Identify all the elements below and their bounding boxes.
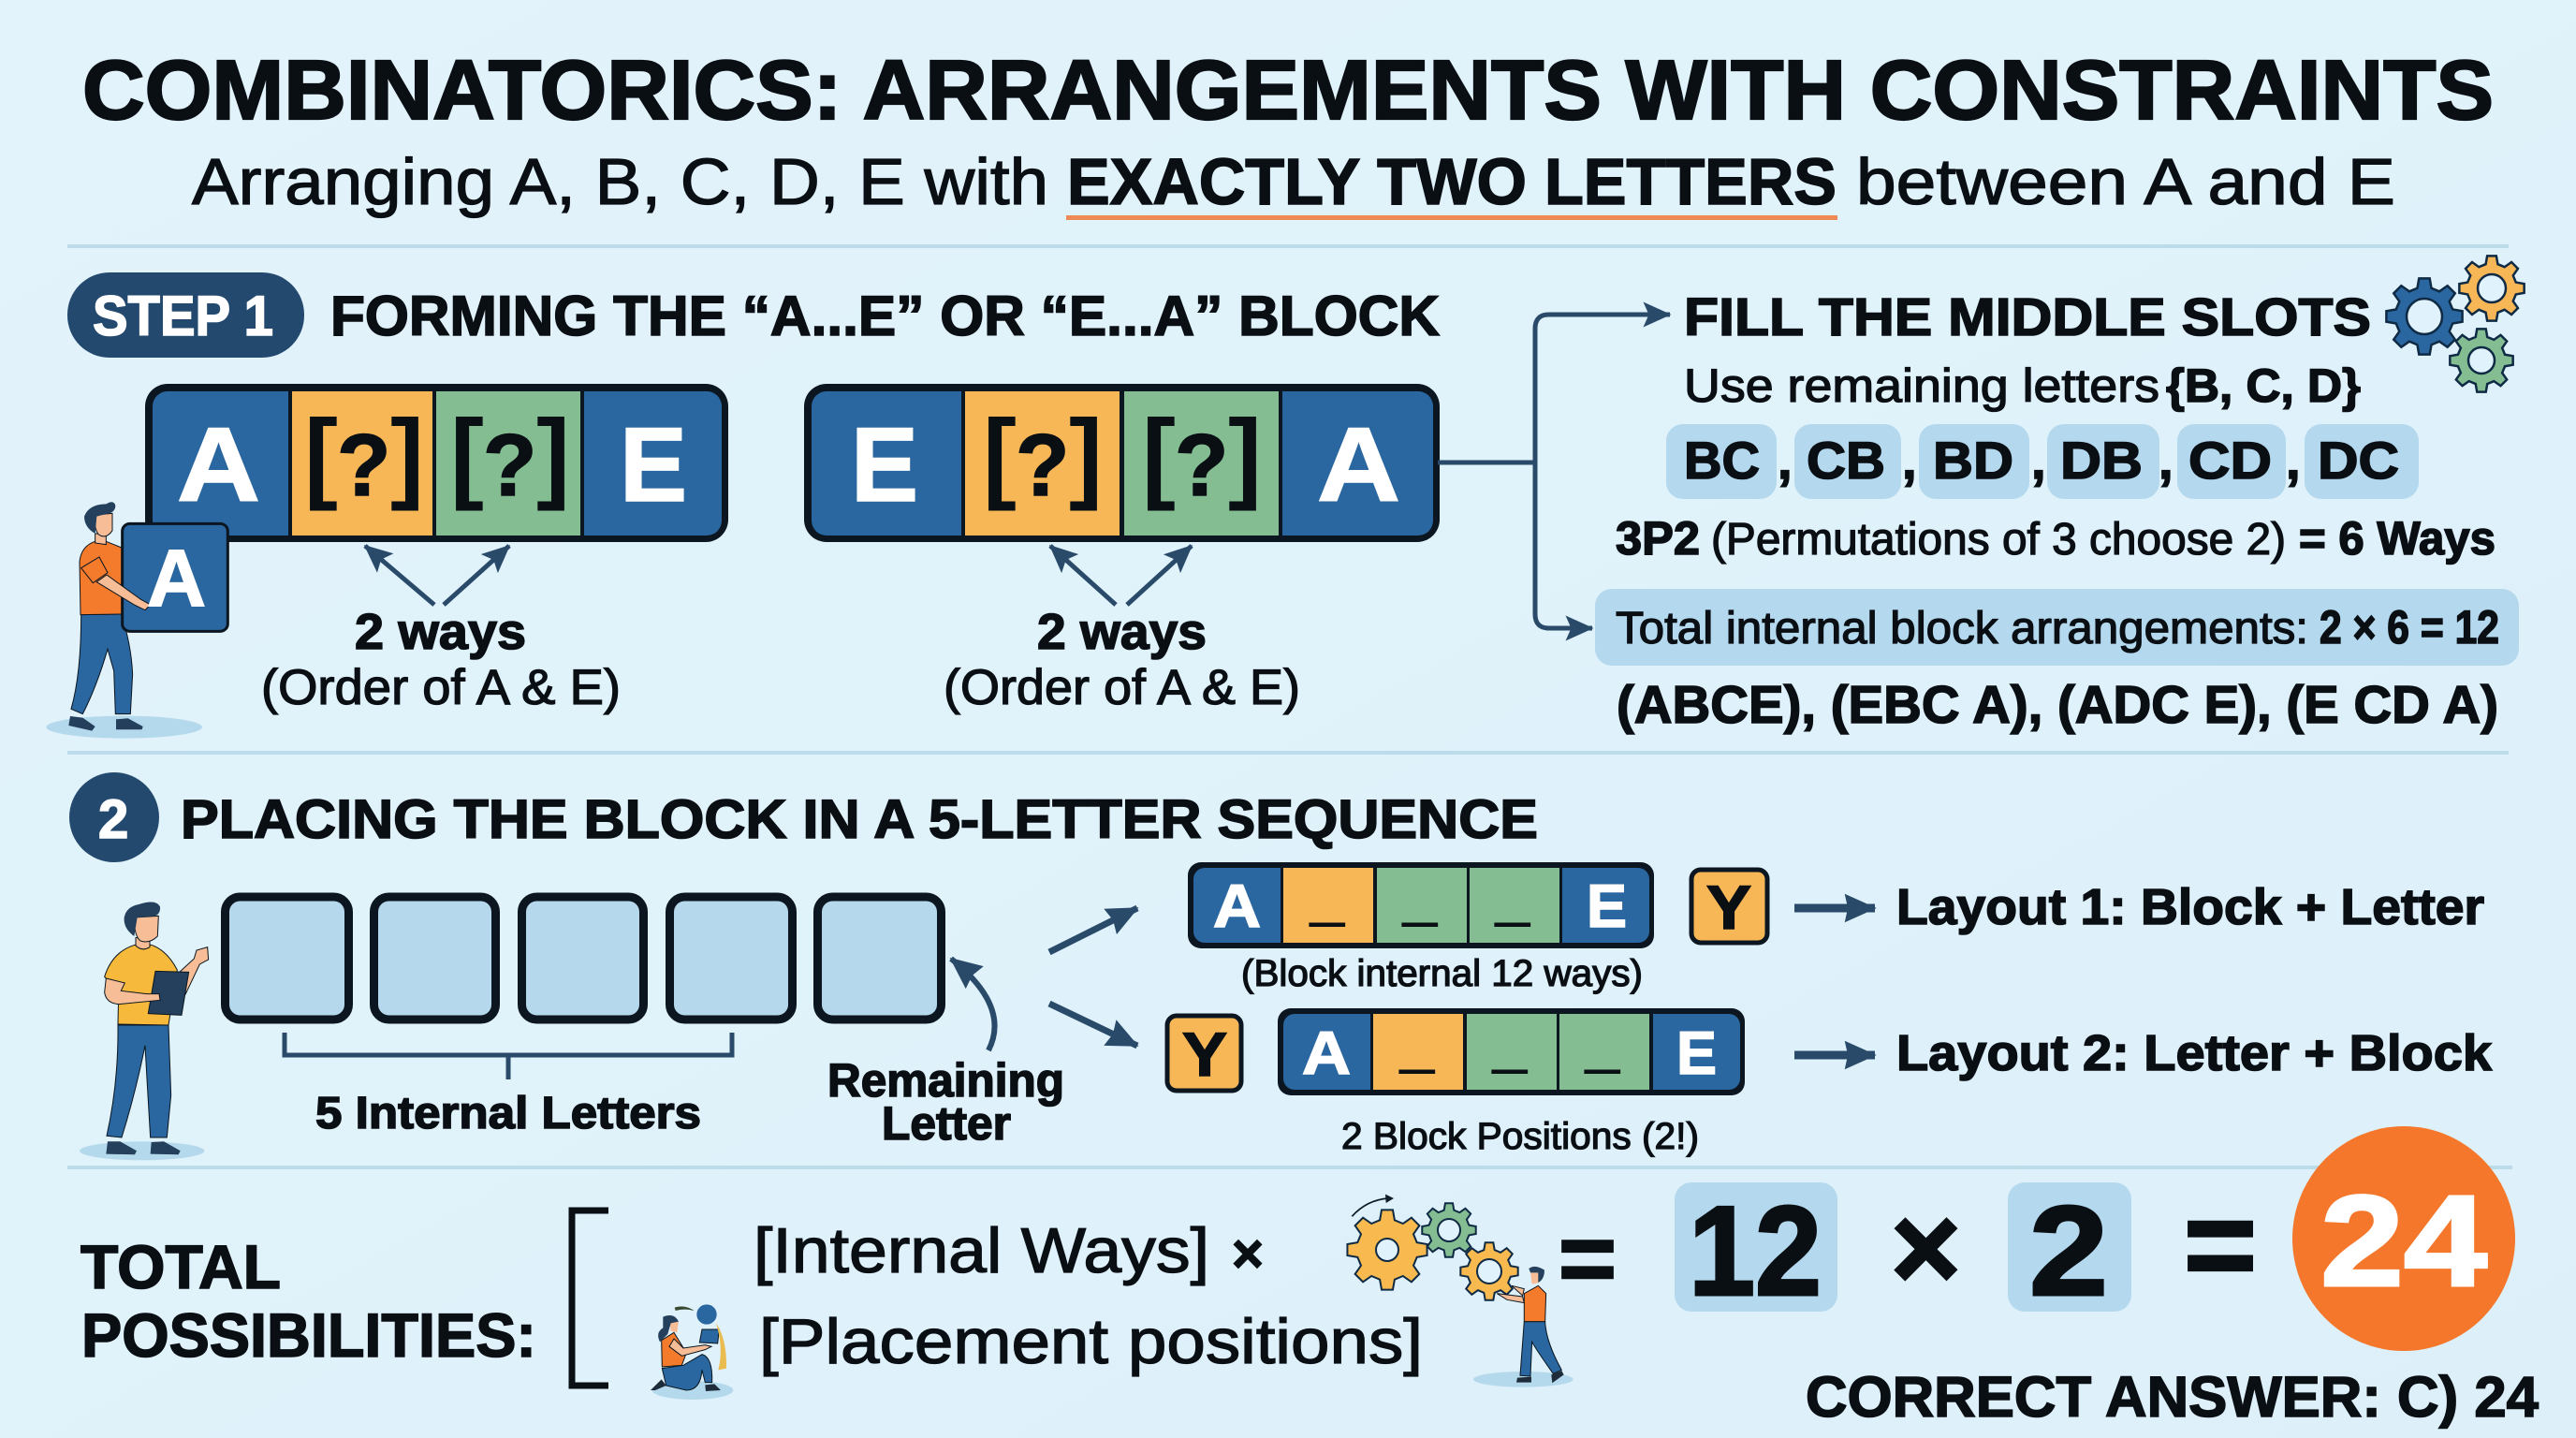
block: E ? ? A: ? bbox=[1175, 416, 1228, 514]
illustration: kneeling person bbox=[651, 1304, 733, 1400]
layout 2 block: _ bbox=[1399, 1011, 1435, 1078]
layout 1 block: _ bbox=[1495, 864, 1530, 932]
layout 1 block: _ bbox=[1310, 864, 1345, 932]
multiply sign: × bbox=[1891, 1181, 1961, 1315]
formula text bbox=[754, 1215, 1423, 1377]
label: 2 ways first block: (Order of A & E) bbox=[261, 660, 621, 715]
text: example arrangements: (ABCE), (EBC A), (ADC E), (E CD A) bbox=[1617, 675, 2498, 735]
step 2 badge bbox=[69, 772, 159, 862]
illustration: gears and person bbox=[1347, 1195, 1573, 1387]
label: 2 ways second block: 2 ways bbox=[1037, 604, 1207, 660]
label: total possibilities: POSSIBILITIES: bbox=[81, 1300, 536, 1370]
illustration: person holding A card bbox=[46, 502, 227, 739]
letter Y after block bbox=[1691, 870, 1767, 943]
callout: total internal arrangements: 2 × 6 = 12 bbox=[2320, 601, 2499, 653]
bracket: five internal letters bbox=[285, 1033, 732, 1079]
heading: fill the middle slots: FILL THE MIDDLE SLOTS bbox=[1684, 287, 2371, 347]
title: COMBINATORICS: ARRANGEMENTS WITH CONSTRAINTS bbox=[82, 44, 2494, 138]
block: E ? ? A: ? bbox=[1016, 416, 1069, 514]
illustration: person with clipboard bbox=[80, 902, 209, 1160]
big opening bracket bbox=[572, 1211, 608, 1386]
text: 3P2 formula: (Permutations of 3 choose 2) bbox=[1711, 515, 2286, 565]
step 1 heading: FORMING THE “A...E” OR “E...A” BLOCK bbox=[330, 285, 1440, 347]
layout 2 block bbox=[1278, 1008, 1745, 1095]
arrow: to layout 1 bbox=[1049, 908, 1137, 952]
chips: letter pairs: , bbox=[2031, 431, 2046, 490]
text: 3P2 formula: = 6 Ways bbox=[2299, 512, 2496, 565]
chips: letter pairs: BD bbox=[1933, 431, 2013, 490]
arrow: layout 2 bbox=[1794, 1050, 1875, 1060]
block: A ? ? E: ? bbox=[483, 416, 536, 514]
label: 2 ways first block: 2 ways bbox=[355, 604, 526, 660]
block: A ? ? E: [ ] bbox=[450, 398, 570, 511]
block: A ? ? E: E bbox=[620, 406, 687, 523]
chips: letter pairs: DB bbox=[2060, 431, 2143, 490]
block: A ? ? E: [ ] bbox=[304, 398, 424, 511]
label: layout 1: Layout 1: Block + Letter bbox=[1896, 879, 2484, 935]
equals sign: = bbox=[1559, 1204, 1617, 1313]
label: total possibilities: TOTAL bbox=[80, 1232, 281, 1301]
number box: 12: 12 bbox=[1689, 1180, 1822, 1322]
step 2 heading: PLACING THE BLOCK IN A 5-LETTER SEQUENCE bbox=[181, 789, 1538, 850]
letter Y before block: Y bbox=[1182, 1020, 1227, 1089]
formula text: [Placement positions] bbox=[759, 1306, 1423, 1377]
label: 2 ways second block: (Order of A & E) bbox=[944, 660, 1300, 715]
number box: 2 bbox=[2008, 1180, 2131, 1322]
label: remaining letter: Remaining bbox=[827, 1054, 1064, 1107]
block: A ? ? E: ? bbox=[337, 416, 390, 514]
five letter slots bbox=[225, 897, 942, 1020]
layout 1 block: _ bbox=[1402, 864, 1438, 932]
illustration: person holding A card: A bbox=[147, 534, 206, 624]
callout: total internal arrangements bbox=[1595, 589, 2519, 666]
arrows: order of first block bbox=[365, 546, 509, 605]
chips: letter pairs: , bbox=[1778, 431, 1793, 490]
letter Y before block bbox=[1167, 1016, 1241, 1091]
formula text: × bbox=[1232, 1224, 1264, 1284]
text: remaining letters bbox=[1684, 360, 2361, 412]
correct answer: CORRECT ANSWER: C) 24 bbox=[1806, 1365, 2539, 1429]
step 2 badge: 2 bbox=[98, 789, 128, 850]
label: five internal letters: 5 Internal Letters bbox=[315, 1089, 701, 1138]
callout: total internal arrangements: Total internal block arrangements: bbox=[1616, 604, 2308, 653]
panel: total possibilities bbox=[80, 1126, 2539, 1429]
step 1 badge: STEP 1 bbox=[93, 285, 273, 347]
text: 3P2 formula bbox=[1616, 512, 2496, 565]
label: remaining letter: Letter bbox=[882, 1097, 1011, 1150]
chips: letter pairs: CB bbox=[1807, 431, 1885, 490]
caption: block positions: 2 Block Positions (2!) bbox=[1341, 1116, 1699, 1157]
block: A ? ? E bbox=[145, 384, 728, 542]
text: remaining letters: Use remaining letters bbox=[1684, 360, 2159, 412]
panel: step 2 placing the block bbox=[69, 772, 2493, 1160]
layout 2 block: _ bbox=[1492, 1011, 1528, 1078]
layout 1 block bbox=[1188, 862, 1654, 948]
arrow: layout 1 bbox=[1794, 904, 1875, 912]
chips: letter pairs: , bbox=[1902, 431, 1917, 490]
label: total possibilities bbox=[80, 1232, 536, 1370]
layout 2 block: E bbox=[1676, 1019, 1717, 1087]
subtitle bbox=[192, 145, 2395, 220]
label: remaining letter bbox=[827, 1054, 1064, 1150]
result circle: 24: 24 bbox=[2320, 1169, 2487, 1313]
arrows: order of second block bbox=[1050, 546, 1192, 605]
label: 2 ways first block bbox=[261, 604, 621, 715]
result circle: 24 bbox=[2292, 1126, 2515, 1351]
chips: letter pairs: DC bbox=[2318, 431, 2399, 490]
label: layout 2: Layout 2: Letter + Block bbox=[1896, 1025, 2493, 1081]
block: E ? ? A: E bbox=[851, 406, 918, 523]
arrow: remaining letter to slot bbox=[951, 959, 995, 1050]
layout 1 block: A bbox=[1213, 872, 1261, 940]
chips: letter pairs: BC bbox=[1684, 431, 1760, 490]
subtitle: EXACTLY TWO LETTERS bbox=[1067, 145, 1837, 218]
label: 2 ways second block bbox=[944, 604, 1300, 715]
subtitle: Arranging A, B, C, D, E with bbox=[192, 145, 1048, 218]
layout 2 block: A bbox=[1302, 1019, 1351, 1087]
subtitle: between A and E bbox=[1856, 145, 2395, 218]
equals sign: = bbox=[2184, 1173, 2257, 1315]
panel: fill the middle slots bbox=[1595, 256, 2525, 735]
chips: letter pairs: , bbox=[2286, 431, 2301, 490]
panel: step 1 forming the block bbox=[46, 272, 1440, 739]
text: remaining letters: {B, C, D} bbox=[2166, 360, 2361, 412]
block: E ? ? A bbox=[804, 384, 1440, 542]
block: A ? ? E: A bbox=[177, 406, 260, 523]
layout 1 block: E bbox=[1587, 872, 1627, 940]
letter Y after block: Y bbox=[1706, 873, 1751, 942]
layout 2 block: _ bbox=[1585, 1011, 1620, 1078]
chips: letter pairs bbox=[1666, 424, 2419, 499]
chips: letter pairs: , bbox=[2159, 431, 2174, 490]
chips: letter pairs: CD bbox=[2188, 431, 2272, 490]
step 1 badge bbox=[67, 272, 304, 358]
block: E ? ? A: A bbox=[1317, 406, 1400, 523]
block: E ? ? A: [ ] bbox=[1142, 398, 1262, 511]
number box: 2: 2 bbox=[2029, 1180, 2108, 1322]
connector arrows to middle slots bbox=[1438, 315, 1670, 628]
arrow: to layout 2 bbox=[1049, 1004, 1137, 1046]
caption: block internal ways: (Block internal 12 ways) bbox=[1241, 953, 1643, 994]
formula text: [Internal Ways] bbox=[754, 1215, 1209, 1286]
text: 3P2 formula: 3P2 bbox=[1616, 512, 1700, 565]
block: E ? ? A: [ ] bbox=[983, 398, 1103, 511]
icon: three gears bbox=[2386, 256, 2525, 392]
